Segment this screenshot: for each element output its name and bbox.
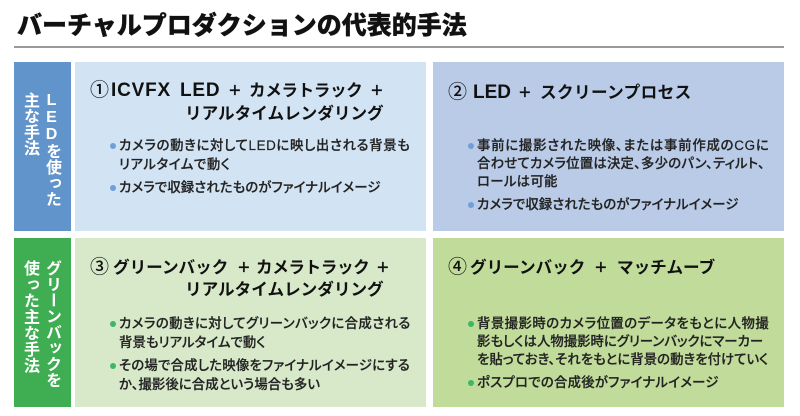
panel 2: [433, 62, 784, 231]
panel 4 heading: マッチムーブ: [617, 258, 715, 277]
panel 2 heading: スクリーンプロセス: [540, 83, 692, 102]
panel 4: [433, 238, 784, 407]
panel 2 heading: +: [519, 82, 531, 104]
bullet text: カメラの動きに対してグリーンバックに合成される: [119, 316, 411, 331]
side label text: 主な手法: 主な手法: [21, 92, 38, 156]
panel 3 heading: カメラトラック: [256, 258, 369, 277]
panel 2 bullet 2: [468, 197, 738, 212]
bullet text: ロールは可能: [477, 174, 558, 189]
panel 2 heading: LED: [473, 82, 511, 103]
panel 1 heading: ①: [90, 80, 109, 101]
side label text: 使った主な手法: 使った主な手法: [21, 260, 38, 373]
panel 1 heading: +: [229, 80, 241, 102]
panel 2 bullet 1: [468, 138, 770, 189]
bullet text: [477, 316, 769, 367]
bullet dot: [468, 143, 474, 149]
bullet text: [119, 358, 410, 392]
panel 3 heading: +: [377, 257, 389, 279]
panel 1 heading: カメラトラック: [249, 81, 362, 100]
bullet dot: [468, 202, 474, 208]
bullet dot: [110, 321, 116, 327]
panel 1: [75, 62, 426, 231]
panel 4 heading: [448, 256, 715, 279]
bullet text: リアルタイムで動く: [119, 156, 231, 172]
title rule: [14, 46, 784, 48]
bullet dot: [110, 363, 116, 369]
bullet dot: [110, 185, 116, 191]
panel 1 bullet 2: [110, 180, 380, 195]
panel 4 heading: +: [595, 257, 607, 279]
panel 1 heading: +: [371, 80, 383, 102]
panel 4 bullet 2: [468, 374, 719, 390]
panel 2 heading: ②: [448, 82, 467, 103]
bullet text: カメラで収録されたものがファイナルイメージ: [119, 180, 380, 195]
panel 1 bullet 1: [110, 138, 411, 172]
bullet text: 背景撮影時のカメラ位置のデータをもとに人物撮: [477, 316, 769, 331]
bullet text: [477, 138, 770, 189]
bullet text: カメラの動きに対してLEDに映し出される背景も: [119, 138, 411, 153]
side label: green screen: [14, 238, 71, 407]
bullet dot: [468, 380, 474, 386]
bullet text: 合わせてカメラ位置は決定、多少のパン、ティルト、: [477, 156, 765, 171]
panel 3 heading: ③: [90, 257, 109, 278]
bullet text: 背景もリアルタイムで動く: [119, 334, 266, 350]
panel 1 heading: リアルタイムレンダリング: [185, 104, 384, 123]
bullet text: [119, 316, 411, 350]
panel 4 heading: グリーンバック: [470, 258, 585, 277]
bullet text: ポスプロでの合成後がファイナルイメージ: [477, 375, 719, 390]
bullet dot: [468, 321, 474, 327]
title: バーチャルプロダクションの代表的手法: [17, 12, 467, 40]
bullet text: を貼っておき、それをもとに背景の動きを付けていく: [477, 352, 768, 367]
panel 3 bullet 2: [110, 358, 410, 392]
panel 1 heading: ICVFX LED: [111, 80, 220, 101]
panel 3 bullet 1: [110, 316, 411, 350]
panel 3 heading: [90, 256, 389, 299]
side label text: グリーンバックを: グリーンバックを: [43, 260, 60, 388]
panel 3 heading: グリーンバック: [113, 258, 228, 277]
panel 1 heading: [90, 80, 384, 123]
panel 4 heading: ④: [448, 257, 467, 278]
panel 4 bullet 1: [468, 316, 769, 367]
bullet text: カメラで収録されたものがファイナルイメージ: [477, 197, 738, 212]
bullet text: 影もしくは人物撮影時にグリーンバックにマーカー: [477, 334, 763, 349]
panel 3: [75, 238, 426, 407]
side label text: LEDを使った: LEDを使った: [43, 92, 60, 207]
bullet text: [119, 138, 411, 172]
panel 3 heading: +: [238, 257, 250, 279]
bullet dot: [110, 143, 116, 149]
bullet text: か、撮影後に合成という場合も多い: [119, 376, 320, 392]
panel 2 heading: [448, 82, 692, 104]
panel 3 heading: リアルタイムレンダリング: [185, 280, 384, 299]
bullet text: 事前に撮影された映像、または事前作成のCGに: [477, 138, 770, 153]
side label: LED: [14, 62, 71, 231]
bullet text: その場で合成した映像をファイナルイメージにする: [119, 358, 410, 373]
